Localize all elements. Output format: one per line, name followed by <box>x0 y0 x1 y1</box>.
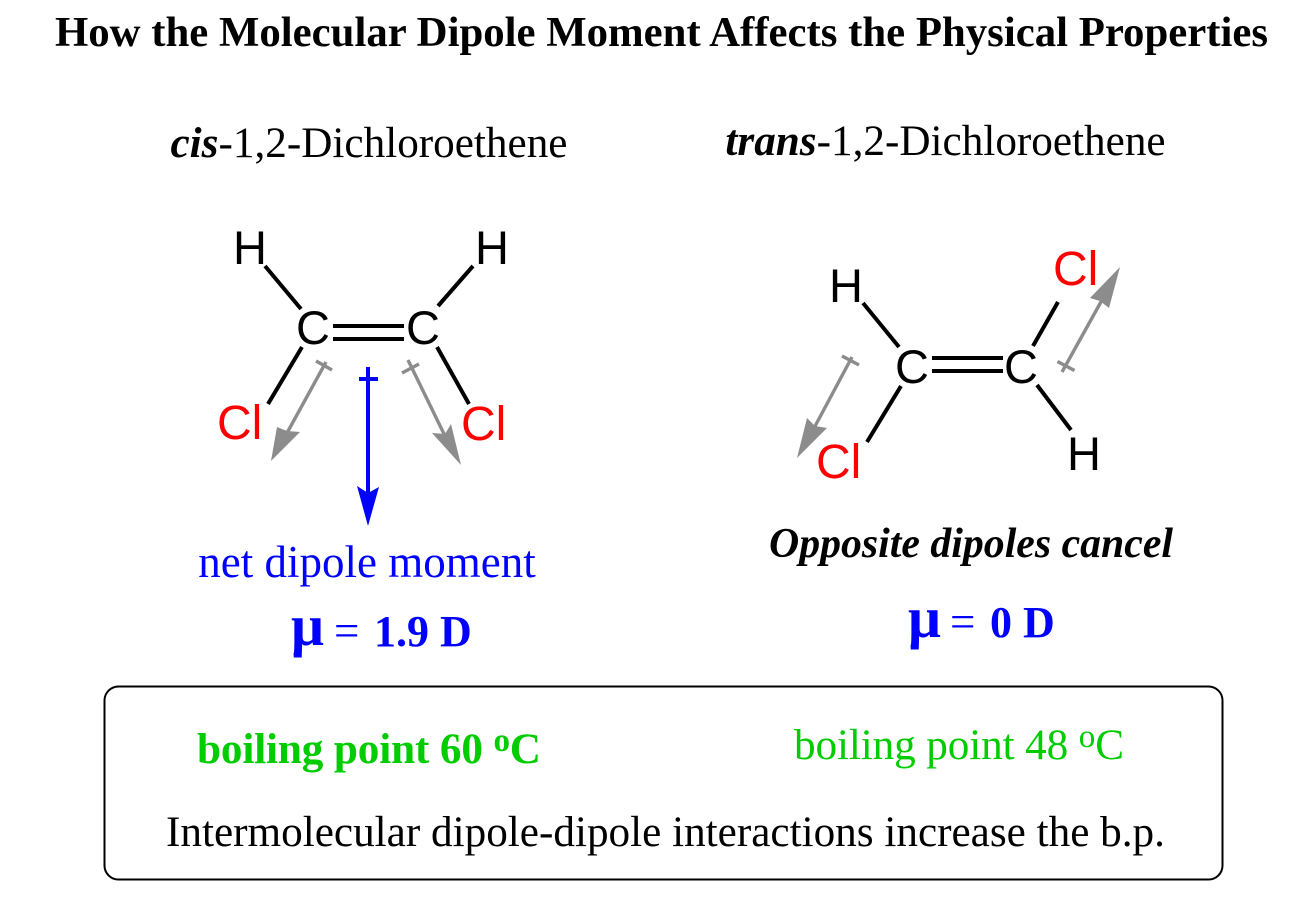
label: trans mu value: = <box>950 597 975 647</box>
label: cis mu value: 1.9 D <box>374 607 472 656</box>
label: cis mu value: = <box>334 606 359 656</box>
text: explanation: Intermolecular dipole-dipole interactions increase the b.p. <box>166 809 1165 856</box>
molecule: cis: H <box>233 221 267 274</box>
label: opposite dipoles cancel: Opposite dipoles cancel <box>769 521 1173 567</box>
arrow: trans right dipole <box>1058 267 1120 372</box>
molecule: trans: Cl <box>1053 243 1098 296</box>
text: trans boiling point: o <box>1079 719 1095 755</box>
molecule: cis: H <box>475 221 509 274</box>
label: cis mu value <box>291 593 472 658</box>
arrow: cis left dipole <box>271 361 332 461</box>
text: trans boiling point: C <box>1095 722 1124 769</box>
panel: boiling points <box>104 686 1222 880</box>
molecule: cis: Cl <box>461 398 506 451</box>
heading: trans: trans-1,2-Dichloroethene <box>725 118 1166 165</box>
label: net dipole moment: net dipole moment <box>198 537 536 587</box>
molecule: cis: C <box>296 301 330 354</box>
text: cis boiling point: boiling point 60 <box>197 726 483 773</box>
arrow: trans left dipole <box>797 356 859 458</box>
molecule: trans <box>797 243 1120 489</box>
arrow: cis right dipole <box>402 360 461 465</box>
label: trans mu value: μ <box>908 585 941 650</box>
title: How the Molecular Dipole Moment Affects the Physical Properties <box>55 9 1268 56</box>
label: cis mu value: μ <box>291 593 324 658</box>
heading: cis: cis-1,2-Dichloroethene <box>171 120 567 167</box>
molecule: cis <box>217 221 509 526</box>
molecule: trans: H <box>829 259 863 312</box>
text: cis boiling point: C <box>510 726 541 773</box>
molecule: trans: H <box>1067 427 1101 480</box>
text: trans boiling point: boiling point 48 <box>794 722 1068 769</box>
text: cis boiling point: o <box>493 723 510 759</box>
label: trans mu value: 0 D <box>990 598 1055 647</box>
molecule: trans: C <box>895 340 929 393</box>
label: trans mu value <box>908 585 1055 650</box>
molecule: trans: C <box>1004 340 1038 393</box>
molecule: cis: C <box>406 301 440 354</box>
molecule: cis: Cl <box>217 397 262 450</box>
arrow: net dipole <box>357 367 379 526</box>
molecule: trans: Cl <box>816 436 861 489</box>
